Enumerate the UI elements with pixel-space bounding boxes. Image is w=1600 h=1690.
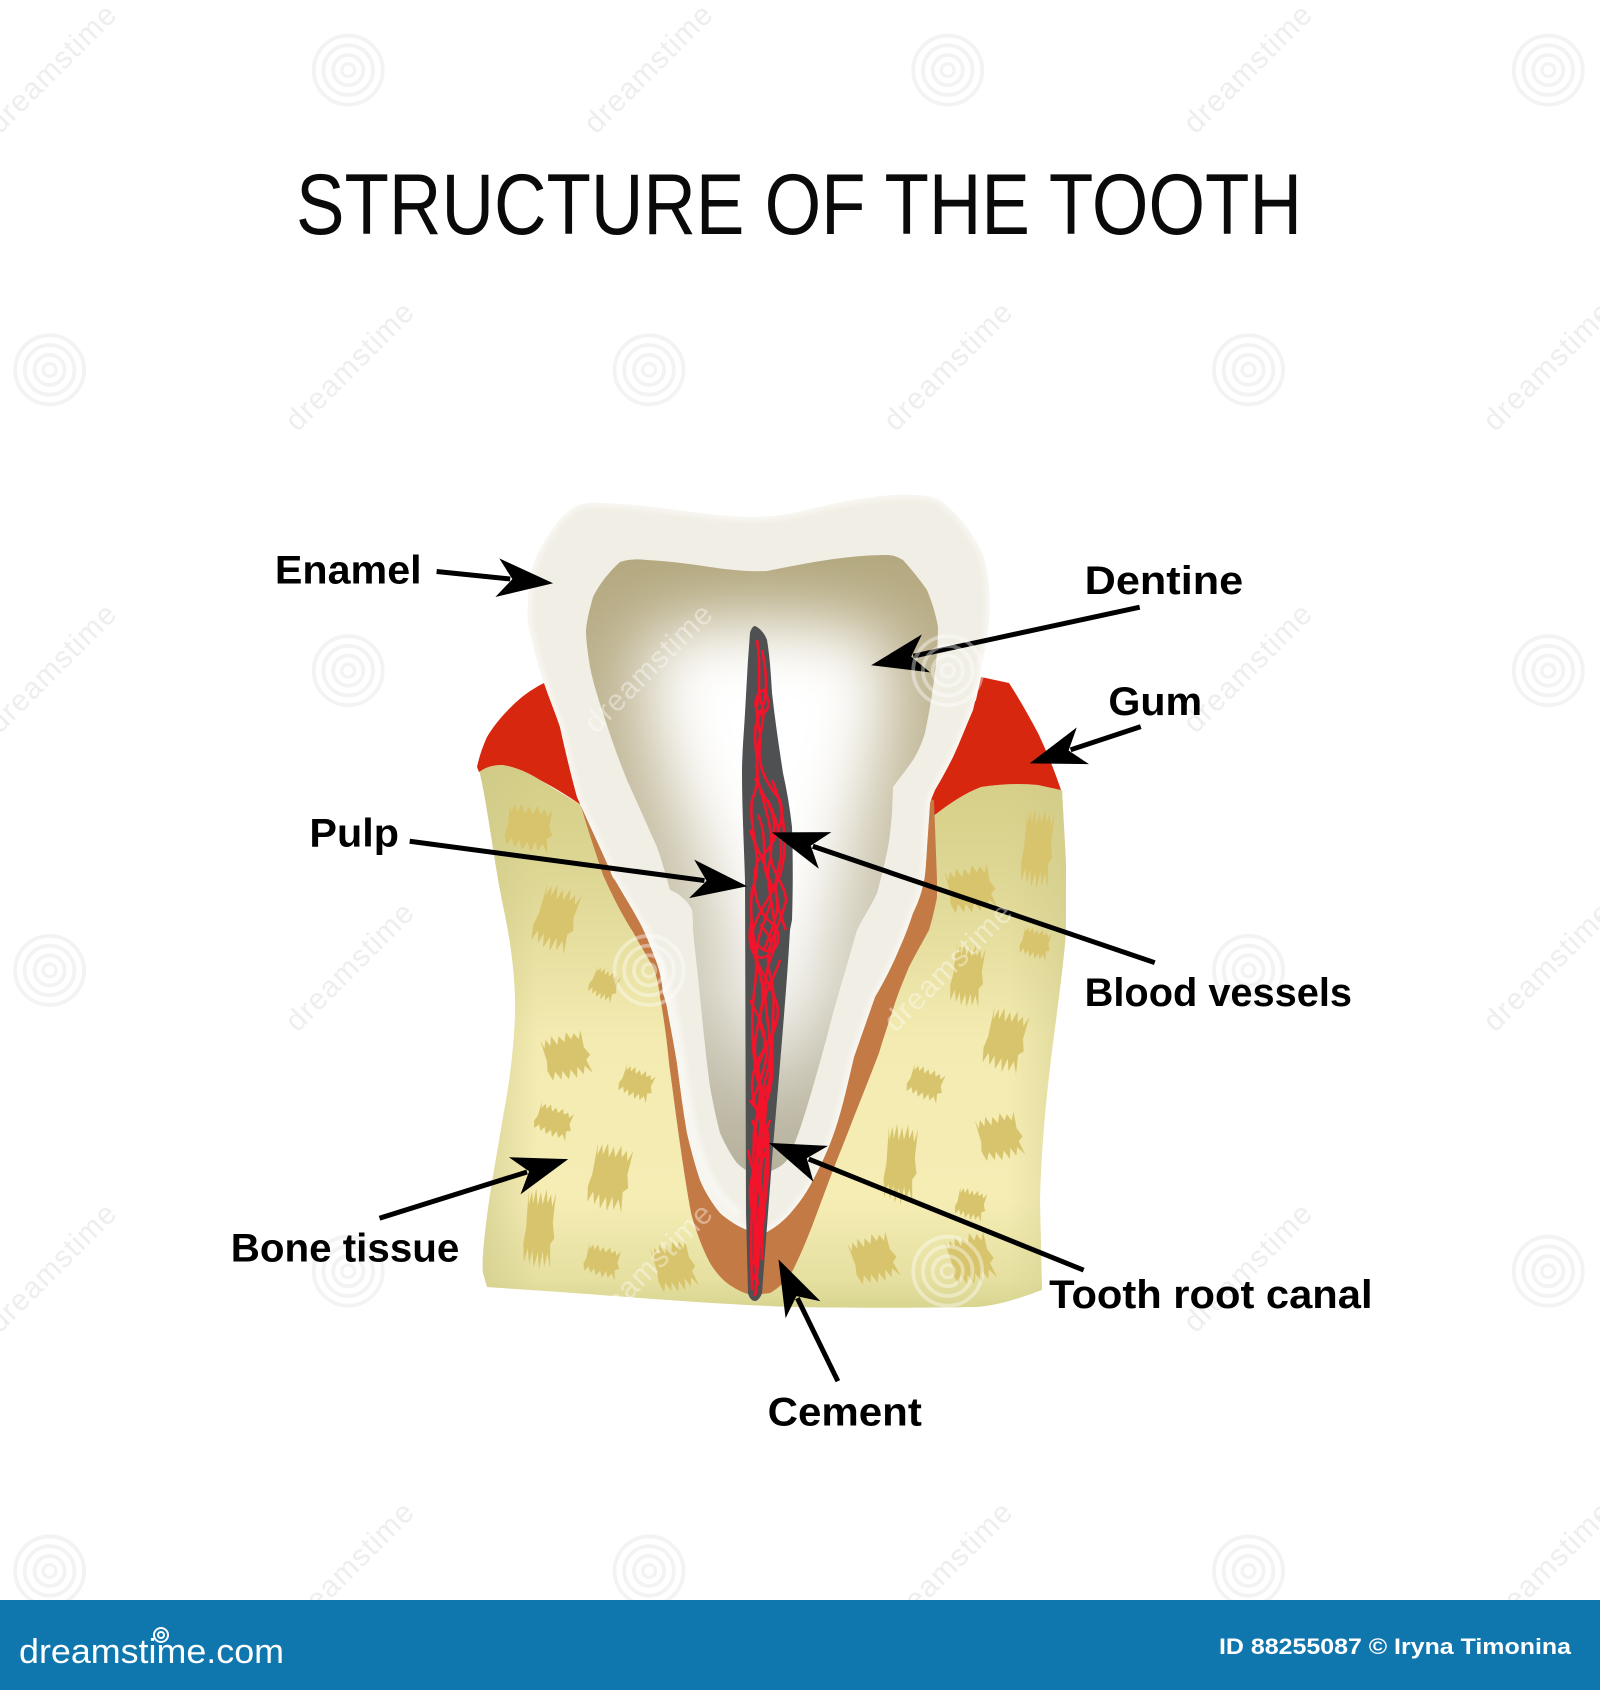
label: Pulp: Pulp	[309, 811, 399, 855]
footer credit: ID 88255087 © Iryna Timonina	[1219, 1634, 1572, 1659]
bone tissue	[479, 765, 1066, 1308]
gum right	[925, 677, 1061, 817]
label: Bone tissue: Bone tissue	[231, 1226, 459, 1270]
labels and arrows	[231, 548, 1373, 1434]
blood vessels	[748, 640, 786, 1296]
arrow: Tooth root canal	[761, 1125, 1091, 1288]
arrow: Bone tissue	[374, 1141, 574, 1237]
footer bar	[0, 1600, 1600, 1690]
label: Blood vessels: Blood vessels	[1085, 971, 1352, 1015]
label: Gum: Gum	[1108, 680, 1202, 724]
tooth illustration	[477, 495, 1066, 1308]
arrow: Blood vessels	[766, 814, 1161, 981]
enamel	[528, 495, 990, 1232]
pulp	[742, 626, 793, 1301]
arrow: Dentine	[867, 588, 1144, 684]
bone patches	[503, 802, 1057, 1297]
dentine	[586, 555, 938, 1171]
label: Cement: Cement	[768, 1390, 922, 1434]
arrow: Pulp	[407, 822, 750, 906]
label: Enamel: Enamel	[275, 548, 422, 592]
arrow: Gum	[1024, 708, 1147, 782]
label: Dentine: Dentine	[1085, 559, 1243, 603]
footer logo spiral	[154, 1628, 168, 1642]
gum left	[477, 683, 590, 805]
label: Tooth root canal: Tooth root canal	[1049, 1273, 1373, 1317]
arrow: Cement	[761, 1251, 855, 1390]
cement	[580, 760, 937, 1295]
footer logo: dreamstime.com	[19, 1633, 284, 1671]
translucent watermark over tooth	[578, 597, 1020, 1339]
title: STRUCTURE OF THE TOOTH	[296, 157, 1302, 253]
arrow: Enamel	[435, 552, 555, 603]
